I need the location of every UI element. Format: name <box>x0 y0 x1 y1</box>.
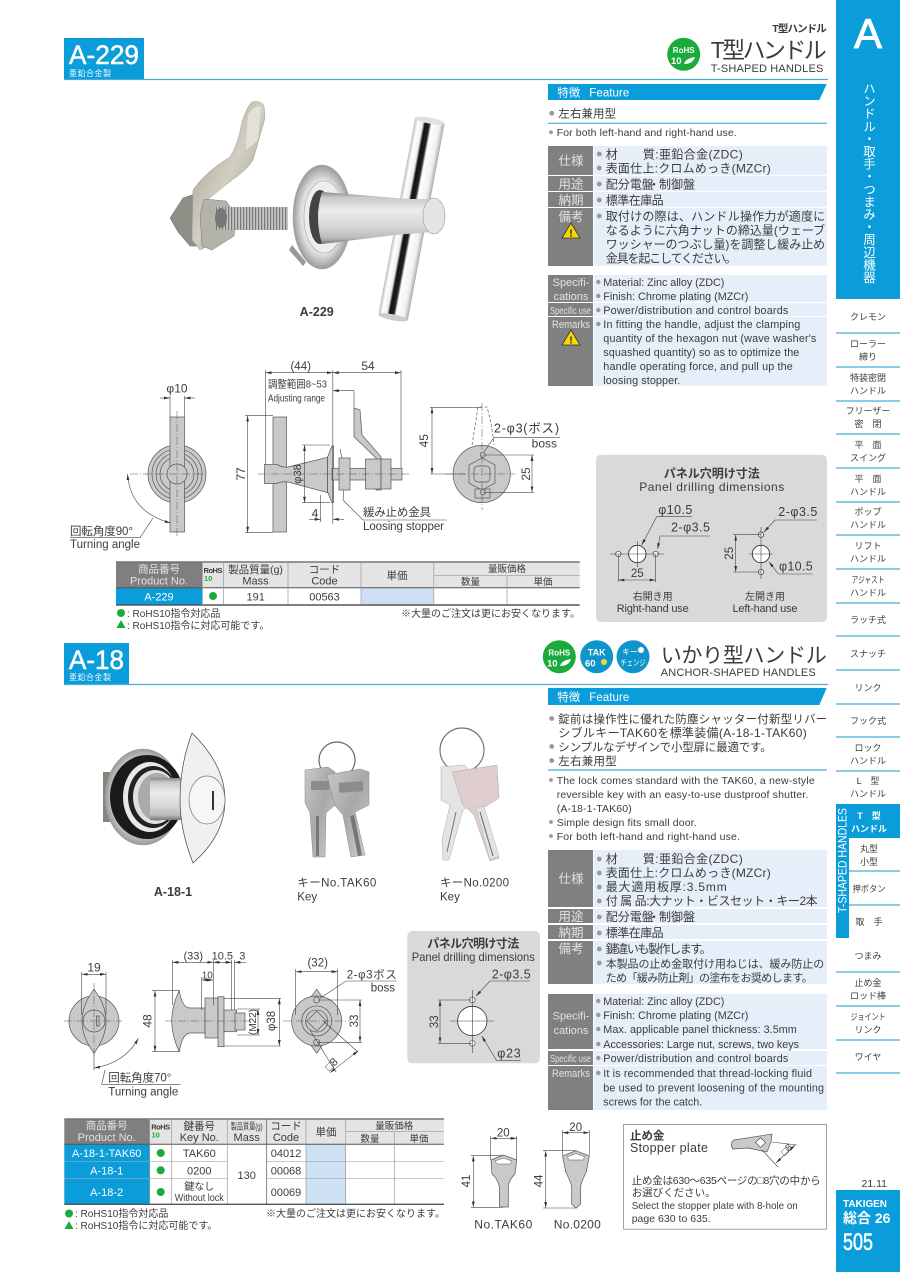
icon: caution triangle EN <box>562 330 580 346</box>
icon: caution triangle EN: ! <box>569 336 573 346</box>
panel: A-18 panel drilling dimensions <box>407 931 540 1063</box>
legend: A-18 RoHS note: : RoHS10指令対応品 <box>75 1207 168 1220</box>
table: A-229 product: 単価 <box>533 576 553 588</box>
panel: A-229 specifications JP: 取付けの際は、ハンドル操作力が適度に <box>606 208 825 224</box>
drawing: key TAK60 dimensions: 41 <box>461 1175 473 1187</box>
sidebar: category list: リンク <box>854 683 882 693</box>
icon: key change: キー <box>622 648 638 656</box>
table: A-18 product: TAK60 <box>183 1148 216 1160</box>
sidebar: category list: ハンドル <box>850 789 886 799</box>
table: A-18 product: 鍵番号 <box>184 1120 215 1132</box>
panel: A-18 feature: Simple design fits small door. <box>557 817 697 829</box>
panel: A-229 panel drilling dimensions: Right-hand use <box>617 603 689 615</box>
panel: A-229 panel drilling dimensions: 25 <box>724 547 736 560</box>
table: A-229 product: 単価 <box>386 569 408 582</box>
panel: A-18 specifications EN: be used to prevent loosening of the mounting <box>603 1082 824 1094</box>
sidebar: category list: アジャスト <box>852 575 884 585</box>
drawing: A-18 rear view: □8 <box>323 1056 341 1074</box>
panel: A-229 specifications JP: ・ <box>648 178 660 192</box>
panel: A-229 specifications EN: handle operating force, and pull up the <box>603 361 793 373</box>
page number block <box>836 1190 900 1272</box>
panel: A-18 specifications JP: 制御盤 <box>659 909 695 924</box>
table: A-18 product: Code <box>273 1132 299 1144</box>
panel: A-229 panel drilling dimensions: 右開き用 <box>633 590 673 603</box>
sidebar: category list: L 型 <box>857 776 879 786</box>
panel: A-18 specifications EN: screws for the catch. <box>603 1096 702 1108</box>
icon: TAK60: 60 <box>585 658 596 670</box>
table: A-229 product: 00563 <box>309 592 340 604</box>
table: A-18 product: 04012 <box>271 1148 301 1160</box>
drawing: A-229 side view: 77 <box>234 467 248 481</box>
sidebar: category list: リンク <box>854 1025 882 1035</box>
panel: A-18 feature: reversible key with an easy-to-use dustproof shutter. <box>557 789 808 801</box>
sidebar: category list: ハンドル <box>850 487 886 497</box>
panel: A-229 specifications EN: quantity of the hexagon nut (wave washer's <box>603 333 817 345</box>
sidebar: category list: 小型 <box>860 857 878 867</box>
photo: 0200 keys <box>440 728 499 861</box>
sidebar: selected category: ハンドル <box>851 824 887 834</box>
header: A-229 badge: 亜鉛合金製 <box>69 68 111 78</box>
header: A-18 badge: A-18 <box>69 645 124 675</box>
drawing: key 0200 dimensions: 44 <box>534 1174 546 1187</box>
sidebar: category list <box>836 312 900 1073</box>
panel: A-229 specifications EN: loosing stopper. <box>603 375 680 387</box>
table: A-18 product: 00068 <box>271 1166 301 1178</box>
drawing: key 0200 dimensions: 20 <box>569 1122 582 1134</box>
sidebar: category list: ハンドル <box>850 588 886 598</box>
table: A-18 product: 00069 <box>271 1187 301 1199</box>
sidebar: category list: つまみ <box>854 951 882 961</box>
drawing: A-18 side view: φ38 <box>266 1011 278 1031</box>
sidebar: category tab: ハンドル・取手・つまみ・周辺機器 <box>861 82 875 284</box>
panel: A-229 panel drilling dimensions: φ10.5 <box>658 503 692 517</box>
legend: A-229 RoHS note: ※大量のご注文は更にお安くなります。 <box>401 607 580 620</box>
drawing: A-229 back view: 45 <box>417 434 431 447</box>
panel: A-18 specifications EN <box>548 994 827 1110</box>
table: A-18 product: 製品質量(g) <box>231 1120 263 1132</box>
sidebar: category list: リフト <box>854 541 882 551</box>
panel: A-18 specifications EN: Specific use <box>550 1054 591 1065</box>
drawing: A-18 side view: (33) <box>184 950 203 962</box>
photo label TAK60 key: Key <box>297 892 317 904</box>
panel: A-229 panel drilling dimensions: パネル穴明け寸法 <box>664 465 760 480</box>
sidebar: category list: ワイヤ <box>855 1052 881 1062</box>
icon: TAK60: TAK <box>588 648 606 658</box>
sidebar: category list: ハンドル <box>850 386 886 396</box>
panel: A-18 specifications EN: Remarks <box>552 1068 590 1080</box>
panel: A-18 specifications JP: 備考 <box>558 942 584 956</box>
table: A-18 product: Product No. <box>78 1132 136 1144</box>
sidebar: category list: ジョイント <box>850 1012 886 1022</box>
sidebar: category list: 平 面 <box>854 474 882 484</box>
sidebar: selected category: T-SHAPED HANDLES <box>836 808 850 913</box>
drawing: key TAK60 dimensions: No.TAK60 <box>474 1217 533 1231</box>
header: A-229 badge <box>64 38 144 79</box>
panel: A-229 specifications EN <box>548 275 827 387</box>
sidebar: category list: ロック <box>854 743 882 753</box>
panel: stopper plate: お選びください。 <box>632 1186 716 1199</box>
sidebar: category list: ラッチ式 <box>850 614 886 625</box>
drawing: A-18 side view: 3 <box>239 950 245 962</box>
panel: A-18 specifications EN: cations <box>554 1025 589 1037</box>
panel: A-18 feature: 左右兼用型 <box>558 754 617 768</box>
panel: A-229 panel drilling dimensions: φ10.5 <box>779 560 813 574</box>
panel: A-229 feature: For both left-hand and right-hand use. <box>557 127 737 139</box>
panel: A-18 feature: 錠前は操作性に優れた防塵シャッター付新型リバー <box>558 712 827 726</box>
panel: A-229 panel drilling dimensions: 2-φ3.5 <box>671 521 710 535</box>
panel: A-229 specifications JP: 表面仕上:クロムめっき(MZCr) <box>606 162 771 176</box>
panel: A-229 specifications JP: なるように六角ナットの締込量(ウェーブ <box>606 222 825 238</box>
panel: stopper plate: Select the stopper plate with 8-hole on <box>632 1200 798 1212</box>
legend: A-18 RoHS note <box>64 1207 445 1232</box>
header: category title <box>667 22 827 75</box>
drawing: A-229 side view: 4 <box>312 507 319 521</box>
header: category title: T型ハンドル <box>711 37 827 63</box>
panel: stopper plate: page 630 to 635. <box>632 1213 711 1225</box>
drawing: key TAK60 dimensions: 20 <box>497 1128 510 1140</box>
panel: A-229 specifications JP: 備考 <box>558 210 584 224</box>
panel: A-18 specifications JP: 仕様 <box>558 871 584 886</box>
drawing: A-229 back view: 2-φ3(ボス) <box>494 422 559 436</box>
header: category title: T-SHAPED HANDLES <box>711 63 823 75</box>
drawing: A-229 front view: 回転角度90° <box>70 525 133 538</box>
panel: A-18 feature: シブルキーTAK60を標準装備(A-18-1-TAK60) <box>558 725 807 740</box>
table: A-229 product: 製品質量(g) <box>228 563 283 576</box>
table: A-229 product: コード <box>309 564 340 576</box>
panel: A-229 specifications EN: Power/distribution and control boards <box>603 305 789 317</box>
panel: A-18 specifications EN: Material: Zinc alloy (ZDC) <box>603 996 724 1008</box>
panel: stopper plate <box>624 1124 826 1229</box>
panel: A-229 specifications JP: 納期 <box>558 192 584 208</box>
icon: TAK60 <box>580 640 613 673</box>
panel: A-229 specifications JP: 金具を起こしてください。 <box>606 252 737 266</box>
table: A-18 product: 130 <box>238 1170 256 1182</box>
panel: A-18 panel drilling dimensions: 33 <box>429 1015 441 1028</box>
panel: A-18 specifications JP: ため「緩み防止剤」の塗布をお奨めします。 <box>606 970 813 984</box>
sidebar: category list: 密 閉 <box>854 418 882 429</box>
panel: A-18 panel drilling dimensions: φ23 <box>497 1047 521 1061</box>
table: A-18 product: A-18-2 <box>90 1187 123 1199</box>
drawing: A-18 rear view: 33 <box>349 1015 361 1027</box>
header: A-18 icons and title: いかり型ハンドル <box>661 644 827 668</box>
sidebar: category list: ハンドル <box>850 554 886 564</box>
drawing: A-229 side view <box>234 359 446 533</box>
photo label A-229: A-229 <box>300 305 334 319</box>
panel: A-18 specifications JP: 付 属 品:大ナット・ビスセット・キー2本 <box>606 894 818 908</box>
panel: stopper plate: 止め金は630～635ページの□8穴の中から <box>632 1174 821 1187</box>
table: A-18 product: 商品番号 <box>86 1119 128 1132</box>
photo: A-18-1 anchor handle <box>103 733 225 863</box>
table: A-18 product: 単価 <box>409 1133 429 1145</box>
panel: A-229 specifications EN: Material: Zinc alloy (ZDC) <box>603 277 724 289</box>
drawing: A-229 front view: φ10 <box>166 382 188 396</box>
panel: A-18 feature: The lock comes standard with the TAK60, a new-style <box>557 775 815 787</box>
icon: RoHS10: 10 <box>547 658 558 670</box>
header: A-18 icons and title: ANCHOR-SHAPED HANDLES <box>661 667 816 679</box>
table: A-229 product: 10 <box>204 574 212 583</box>
panel: A-18 specifications EN: Specifi- <box>553 1010 590 1022</box>
sidebar: category list: スナッチ <box>850 649 886 659</box>
legend: A-229 RoHS note <box>116 607 580 632</box>
drawing: A-18 side view: 10 <box>202 970 213 981</box>
photo label 0200 key <box>440 878 509 904</box>
drawing: A-18 rear view: (32) <box>307 958 328 970</box>
sidebar: selected category <box>836 804 900 938</box>
icon: key change: チェンジ <box>620 658 646 668</box>
icon: stopper plate <box>731 1134 797 1167</box>
panel: A-229 specifications JP: 標準在庫品 <box>606 192 664 208</box>
legend: A-18 RoHS note: ※大量のご注文は更にお安くなります。 <box>266 1207 445 1220</box>
panel: A-18 specifications JP: 配分電盤 <box>606 910 654 924</box>
photo label 0200 key: Key <box>440 892 460 904</box>
panel: A-229 specifications JP: ワッシャーのつぶし量)を調整し緩み止め <box>606 238 825 252</box>
drawing: A-18 front view: Turning angle <box>108 1087 178 1099</box>
table: A-229 product: Mass <box>242 576 269 588</box>
icon: caution triangle: ! <box>569 228 573 240</box>
sidebar: category list: クレモン <box>850 312 886 322</box>
icon: RoHS10: RoHS <box>548 648 571 658</box>
sidebar: category list: 止め金 <box>854 977 882 988</box>
drawing: A-18 front view <box>64 961 181 1099</box>
panel: A-18 specifications JP: 本製品の止め金取付け用ねじは、緩み防止の <box>606 956 824 970</box>
header: A-18 icons and title <box>543 640 827 679</box>
table: A-229 product: Code <box>311 576 338 588</box>
drawing: key 0200 dimensions: No.0200 <box>554 1217 601 1231</box>
page date: 21.11 <box>862 1178 887 1190</box>
drawing: A-18 rear view: boss <box>371 983 395 995</box>
panel: A-229 panel drilling dimensions: Left-hand use <box>732 603 798 615</box>
drawing: A-18 side view <box>140 950 281 1052</box>
table: A-18 product: 10 <box>152 1130 160 1140</box>
page number block: 505 <box>843 1229 873 1256</box>
table: A-229 product: 量販価格 <box>488 563 526 575</box>
table: A-229 product: Product No. <box>130 576 188 588</box>
legend: A-18 RoHS note: : RoHS10指令に対応可能です。 <box>75 1219 217 1232</box>
sidebar: category list: 締り <box>859 351 877 362</box>
drawing: A-229 side view: Loosing stopper <box>363 521 444 533</box>
photo label TAK60 key: キーNo.TAK60 <box>297 878 376 890</box>
panel: A-229 specifications JP <box>548 146 827 266</box>
panel: A-18 feature: Feature <box>589 692 629 704</box>
table: A-18 product: A-18-1 <box>90 1166 123 1178</box>
icon: caution triangle <box>562 223 580 240</box>
panel: A-229 feature: 左右兼用型 <box>558 107 616 121</box>
panel: A-18 specifications EN: Power/distribution and control boards <box>603 1053 789 1065</box>
photo: TAK60 keys <box>305 742 369 857</box>
header: category title: T型ハンドル <box>772 22 827 35</box>
panel: A-229 feature: 特徴 <box>557 86 581 100</box>
table: A-18 product: Key No. <box>180 1132 219 1144</box>
panel: A-229 specifications JP: 制御盤 <box>659 176 695 192</box>
panel: A-18 specifications JP: 納期 <box>558 925 584 940</box>
panel: A-18 specifications EN: Max. applicable panel thickness: 3.5mm <box>603 1024 797 1036</box>
sidebar: category list: 丸型 <box>860 843 878 854</box>
drawing: A-229 side view: (44) <box>290 361 311 373</box>
table: A-18 product: 数量 <box>360 1133 380 1145</box>
photo label A-18-1: A-18-1 <box>154 885 192 899</box>
sidebar: category tab: A <box>854 10 882 57</box>
drawing: A-229 side view: 緩み止め金具 <box>363 506 431 519</box>
table: A-229 product: 191 <box>247 592 265 604</box>
table: A-18 product: RoHS <box>151 1122 170 1132</box>
sidebar: category list: ロッド棒 <box>850 990 886 1001</box>
drawing: A-18 side view: (M22) <box>248 1009 259 1035</box>
table: A-18 product: Without lock <box>175 1193 225 1204</box>
panel: A-18 specifications JP: 標準在庫品 <box>606 925 664 940</box>
panel: A-18 specifications EN: It is recommended that thread-locking fluid <box>603 1068 812 1080</box>
icon: RoHS10 <box>543 640 576 673</box>
panel: A-229 specifications JP: 用途 <box>558 178 584 192</box>
legend: A-229 RoHS note: : RoHS10指令に対応可能です。 <box>127 619 269 632</box>
sidebar: category list: 押ボタン <box>852 883 886 894</box>
panel: A-229 specifications EN: Specific use <box>550 306 591 317</box>
table: A-229 product: 商品番号 <box>138 563 180 576</box>
sidebar: category list: 取 手 <box>855 916 883 927</box>
panel: A-229 panel drilling dimensions: 2-φ3.5 <box>778 505 817 519</box>
panel: A-229 specifications EN: Finish: Chrome plating (MZCr) <box>603 291 748 303</box>
panel: A-18 feature: 特徴 <box>557 690 581 704</box>
panel: A-229 specifications EN: cations <box>554 291 589 303</box>
table: A-229 product <box>116 562 580 605</box>
panel: stopper plate: 止め金 <box>630 1128 665 1142</box>
panel: A-18 feature <box>548 688 827 843</box>
header: A-18 badge <box>64 643 129 684</box>
drawing: A-229 front view: Turning angle <box>70 539 140 551</box>
panel: A-229 specifications JP: 配分電盤 <box>606 178 654 192</box>
table: A-18 product: A-18-1-TAK60 <box>72 1148 141 1160</box>
drawing: A-229 side view: Adjusting range <box>268 393 325 405</box>
icon: stopper plate: □8 <box>779 1142 796 1158</box>
table: A-229 product: A-229 <box>144 592 174 604</box>
drawing: A-18 side view: 48 <box>140 1014 154 1028</box>
header: A-229 badge: A-229 <box>69 40 139 70</box>
table: A-18 product: コード <box>270 1120 302 1132</box>
sidebar: category list: スイング <box>850 452 886 463</box>
table: A-18 product: 単価 <box>316 1126 336 1138</box>
panel: A-18 specifications JP: 材 質:亜鉛合金(ZDC) <box>606 851 743 866</box>
table: A-229 product: RoHS <box>204 566 222 575</box>
drawing: A-229 back view: boss <box>532 437 557 451</box>
sidebar: category list: 平 面 <box>854 440 882 450</box>
sidebar: category list: ポップ <box>854 507 882 517</box>
panel: stopper plate: Stopper plate <box>630 1141 708 1155</box>
header: A-18 badge: 亜鉛合金製 <box>69 672 111 682</box>
panel: A-18 feature: (A-18-1-TAK60) <box>557 803 632 815</box>
drawing: A-229 back view <box>417 403 560 510</box>
drawing: A-18 rear view <box>283 958 397 1074</box>
sidebar: category list: フリーザー <box>846 406 890 416</box>
table: A-229 product: 数量 <box>461 576 480 588</box>
panel: A-18 specifications JP: 最大適用板厚:3.5mm <box>606 880 727 894</box>
panel: A-18 specifications JP: 用途 <box>558 910 584 924</box>
panel: A-18 panel drilling dimensions: パネル穴明け寸法 <box>427 936 519 951</box>
table: A-18 product: Mass <box>234 1132 260 1144</box>
photo label 0200 key: キーNo.0200 <box>440 878 509 890</box>
legend: A-229 RoHS note: : RoHS10指令対応品 <box>127 607 220 620</box>
table: A-18 product: 鍵なし <box>184 1180 214 1193</box>
sidebar: category list: ローラー <box>850 339 886 349</box>
page number block: 総合 26 <box>843 1210 891 1226</box>
drawing: A-18 rear view: 2-φ3ボス <box>347 968 397 981</box>
photo: A-229 T-handle <box>170 102 445 323</box>
panel: A-18 specifications EN: Finish: Chrome plating (MZCr) <box>603 1010 748 1022</box>
drawing: A-18 side view: 10.5 <box>212 950 233 962</box>
panel: A-229 specifications EN: Specifi- <box>553 277 590 289</box>
header: category title: 10 <box>671 56 682 67</box>
header: category title: RoHS <box>673 46 695 55</box>
panel: A-229 feature <box>548 84 827 139</box>
panel: A-18 specifications JP <box>548 850 827 984</box>
sidebar: selected category: T 型 <box>857 810 881 821</box>
panel: A-229 panel drilling dimensions: 左開き用 <box>745 590 785 603</box>
drawing: A-229 side view: 調整範囲8~53 <box>268 378 327 391</box>
drawing: A-229 front view <box>70 382 208 551</box>
panel: A-18 panel drilling dimensions: 2-φ3.5 <box>492 967 531 981</box>
drawing: A-229 side view: 54 <box>361 359 375 373</box>
panel: A-229 panel drilling dimensions <box>596 455 827 622</box>
drawing: A-18 front view: 回転角度70° <box>108 1072 171 1085</box>
panel: A-229 specifications EN: In fitting the handle, adjust the clamping <box>603 319 800 331</box>
panel: A-18 feature: シンプルなデザインで小型扉に最適です。 <box>558 740 772 754</box>
sidebar: category tab <box>836 0 900 299</box>
table: A-18 product: 0200 <box>187 1166 212 1178</box>
photo label TAK60 key <box>297 878 376 904</box>
page number block: TAKIGEN <box>843 1198 887 1210</box>
sidebar: category list: ハンドル <box>850 520 886 530</box>
table: A-18 product <box>64 1119 444 1204</box>
table: A-18 product: 量販価格 <box>375 1120 414 1132</box>
panel: A-229 specifications EN: Remarks <box>552 319 590 331</box>
panel: A-18 specifications JP: 表面仕上:クロムめっき(MZCr) <box>606 866 771 880</box>
panel: A-229 specifications JP: 材 質:亜鉛合金(ZDC) <box>606 146 743 162</box>
panel: A-229 feature: Feature <box>589 88 629 100</box>
sidebar: category list: フック式 <box>850 715 886 726</box>
drawing: key 0200 dimensions <box>534 1122 601 1231</box>
drawing: key TAK60 dimensions <box>461 1128 533 1231</box>
panel: A-229 specifications JP: 仕様 <box>558 153 584 168</box>
panel: A-18 panel drilling dimensions: Panel drilling dimensions <box>412 950 535 964</box>
panel: A-18 specifications JP: 鍵違いも製作します。 <box>606 942 712 956</box>
panel: A-229 panel drilling dimensions: 25 <box>631 568 644 580</box>
sidebar: category list: 特装密閉 <box>850 372 886 383</box>
sidebar: category list: ハンドル <box>850 756 886 766</box>
drawing: A-229 side view: φ38 <box>292 464 304 484</box>
panel: A-229 specifications EN: squashed quantity) so as to optimize the <box>603 347 799 359</box>
panel: A-229 panel drilling dimensions: Panel drilling dimensions <box>639 480 784 494</box>
drawing: A-18 front view: 19 <box>87 961 101 975</box>
icon: key change <box>616 640 650 673</box>
drawing: A-229 back view: 25 <box>519 467 533 481</box>
panel: A-18 feature: For both left-hand and right-hand use. <box>557 831 740 843</box>
panel: A-18 specifications JP: ・ <box>648 910 660 924</box>
panel: A-18 specifications EN: Accessories: Large nut, screws, two keys <box>603 1039 800 1051</box>
